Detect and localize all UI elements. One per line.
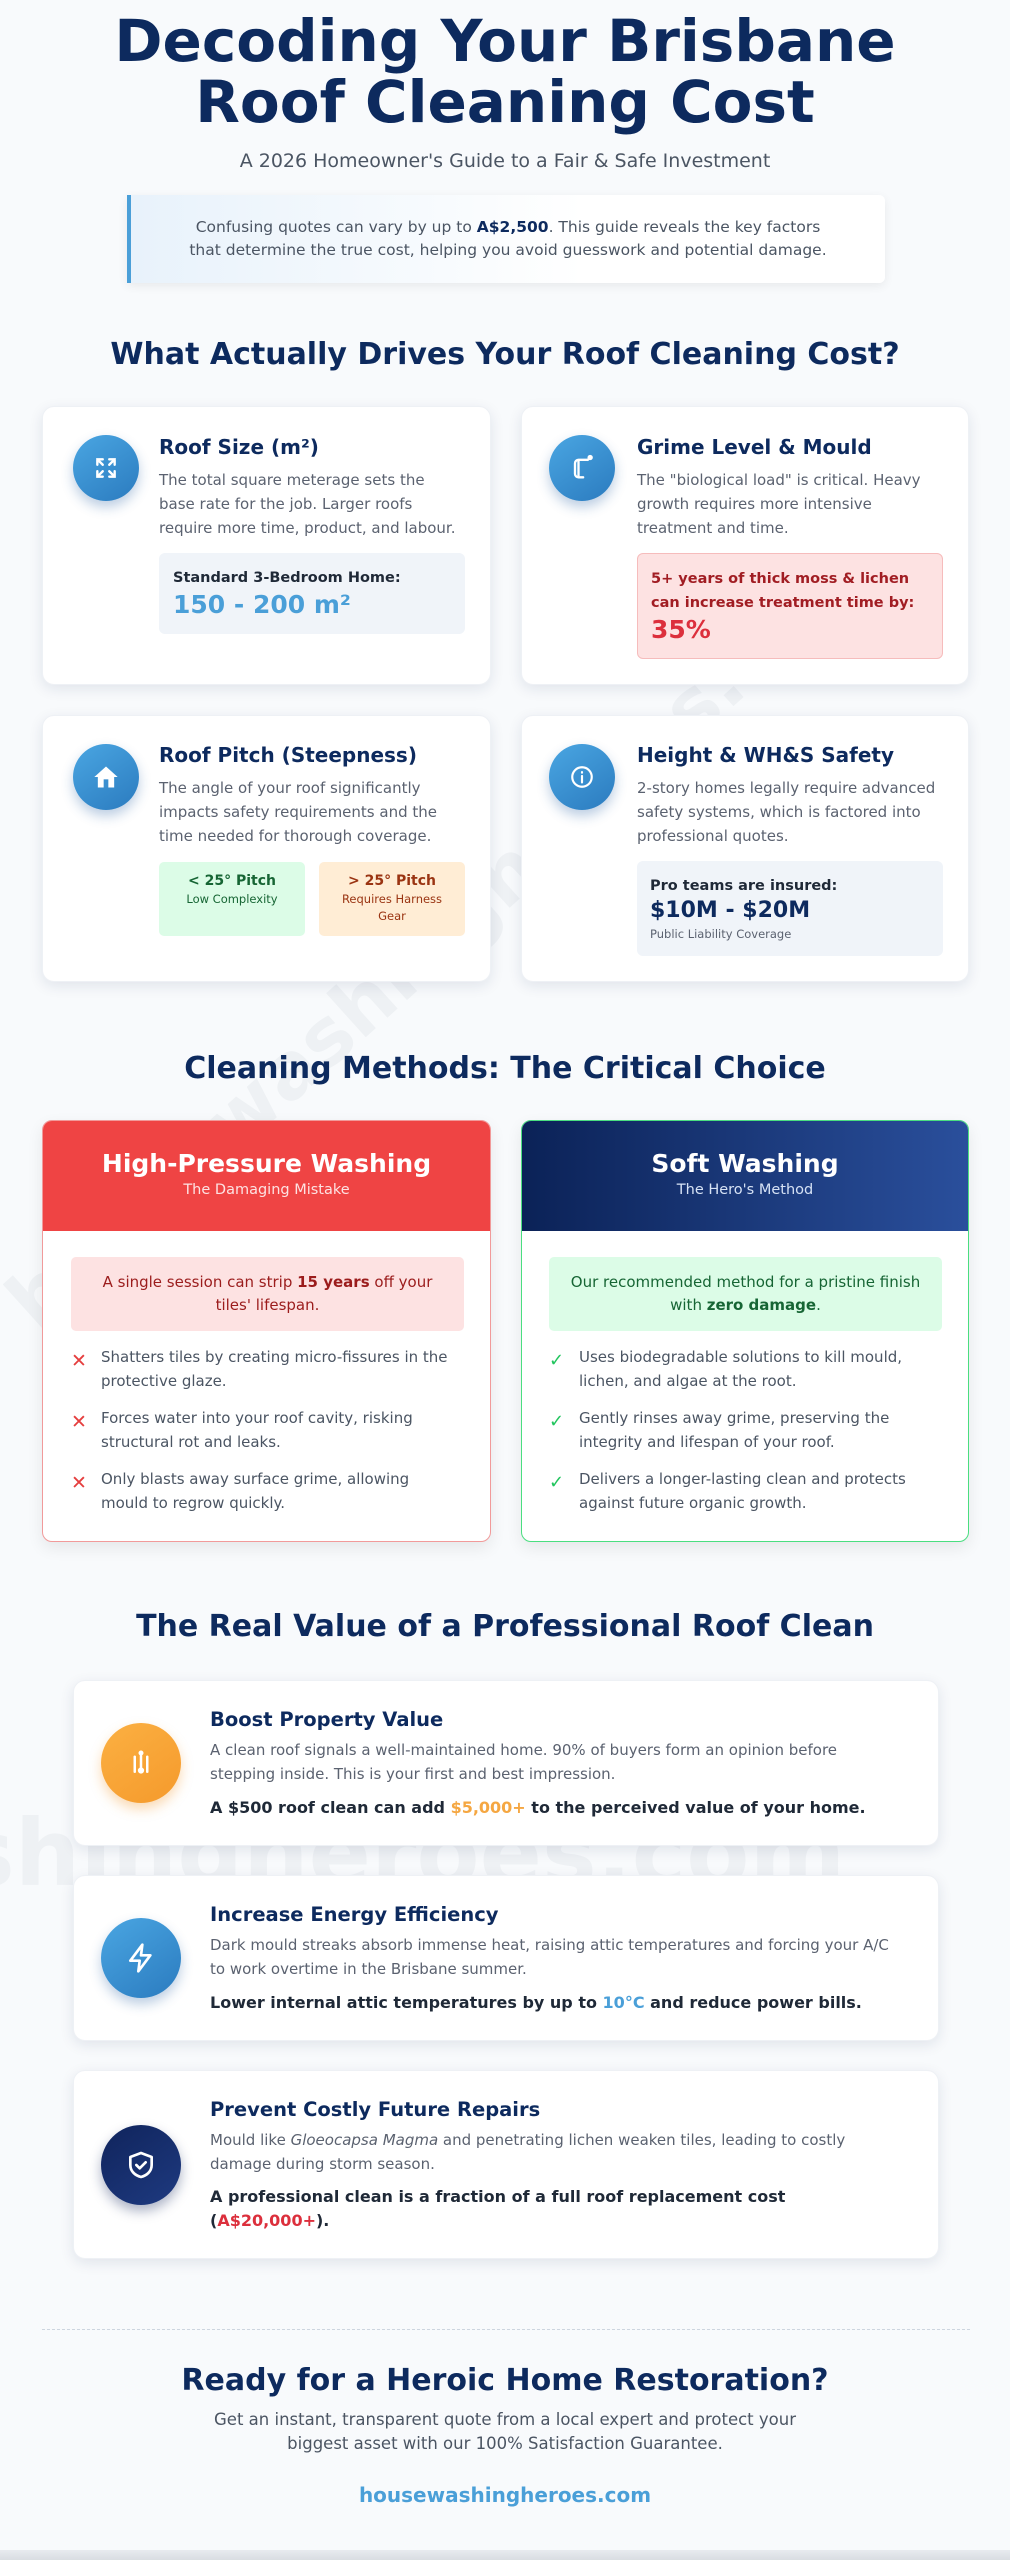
- highlight: A professional clean is a fraction of a full roof replacement cost: [210, 2187, 785, 2206]
- highlight: Lower internal attic temperatures by up to 10°C and reduce power bills.: [210, 1993, 862, 2012]
- heading: Grime Level & Mould: [637, 435, 872, 459]
- pitch: low: < 25° Pitch: [188, 873, 276, 889]
- text: 2-story homes legally require advanced: [637, 779, 935, 797]
- header: [522, 1121, 968, 1231]
- panel: soft wash: [521, 1120, 969, 1542]
- header: [43, 1121, 490, 1231]
- stat box: [159, 553, 465, 634]
- panel: repairs: [73, 2070, 939, 2259]
- intro callout: that determine the true cost, helping you avoid guesswork and potential damage.: [189, 241, 827, 259]
- text: growth requires more intensive: [637, 495, 872, 513]
- stat box: red: 5+ years of thick moss & lichen: [651, 571, 909, 587]
- callout: tiles' lifespan.: [216, 1296, 319, 1314]
- CTA text: [214, 2410, 796, 2453]
- callout: A single session can strip 15 years off your: [103, 1273, 432, 1291]
- list: positives: ✓: [549, 1411, 564, 1432]
- list: negatives: mould to regrow quickly.: [101, 1494, 285, 1512]
- heading: Height & WH&S Safety: [637, 743, 894, 767]
- text: treatment and time.: [637, 519, 789, 537]
- CTA text: biggest asset with our 100% Satisfaction Guarantee.: [287, 2434, 723, 2453]
- icon: hook: [549, 435, 615, 501]
- header: The Hero's Method: [677, 1182, 813, 1198]
- heading: methods: Cleaning Methods: The Critical Choice: [184, 1051, 826, 1086]
- stat box: Public Liability Coverage: [650, 927, 791, 941]
- list: negatives: protective glaze.: [101, 1372, 227, 1390]
- watermark diagonal: housewashingheroes.: [0, 639, 762, 1347]
- text: The total square meterage sets the: [159, 471, 425, 489]
- highlight: [210, 2187, 786, 2230]
- callout: with zero damage.: [670, 1296, 821, 1314]
- text: Dark mould streaks absorb immense heat, raising attic temperatures and forcing your A/C: [210, 1936, 889, 1954]
- list: positives: ✓: [549, 1350, 564, 1371]
- list: positives: lichen, and algae at the root.: [579, 1372, 796, 1390]
- list: positives: integrity and lifespan of your roof.: [579, 1433, 835, 1451]
- text: [158, 779, 437, 845]
- heading: cost drivers: What Actually Drives Your Roof Cleaning Cost?: [110, 337, 900, 372]
- callout: Our recommended method for a pristine finish: [571, 1273, 920, 1291]
- pitch: high: Requires Harness: [342, 892, 442, 906]
- stat box: [637, 861, 943, 956]
- title: [114, 7, 896, 136]
- list: positives: Uses biodegradable solutions to kill mould,: [579, 1348, 902, 1366]
- text: base rate for the job. Larger roofs: [159, 495, 412, 513]
- panel: grime: [521, 406, 969, 685]
- pitch: high: > 25° Pitch: [348, 873, 436, 889]
- stat box: Pro teams are insured:: [650, 878, 837, 894]
- intro callout: Confusing quotes can vary by up to A$2,500. This guide reveals the key factors: [196, 218, 820, 236]
- icon: expand: [73, 435, 139, 501]
- text: [210, 1741, 837, 1783]
- text: require more time, product, and labour.: [159, 519, 455, 537]
- list: negatives: ✕: [71, 1350, 87, 1372]
- panel: property value: [73, 1680, 939, 1846]
- list: positives: Gently rinses away grime, preserving the: [579, 1409, 889, 1427]
- text: [210, 2131, 845, 2173]
- stat box: $10M - $20M: [650, 898, 810, 923]
- title: Decoding Your Brisbane: [114, 7, 896, 75]
- list: negatives: Shatters tiles by creating micro-fissures in the: [101, 1348, 448, 1366]
- header: Soft Washing: [651, 1149, 839, 1178]
- list: negatives: [71, 1348, 448, 1512]
- text: impacts safety requirements and the: [159, 803, 437, 821]
- stat box: Standard 3-Bedroom Home:: [173, 570, 401, 586]
- text: stepping inside. This is your first and best impression.: [210, 1765, 615, 1783]
- highlight: A $500 roof clean can add $5,000+ to the perceived value of your home.: [210, 1798, 866, 1817]
- panel: roof size: [42, 406, 491, 685]
- stat box: red: 35%: [651, 615, 711, 644]
- text: [637, 779, 935, 845]
- stat box: 150 - 200 m²: [173, 590, 351, 619]
- pitch: high: [319, 862, 465, 936]
- heading: Roof Pitch (Steepness): [159, 743, 417, 767]
- heading: Roof Size (m²): [159, 435, 319, 459]
- pitch: low: [159, 862, 305, 936]
- callout: [71, 1257, 464, 1331]
- callout: [549, 1257, 942, 1331]
- panel: high pressure: [42, 1120, 491, 1542]
- text: The "biological load" is critical. Heavy: [637, 471, 921, 489]
- heading: value: The Real Value of a Professional Roof Clean: [136, 1609, 874, 1644]
- text: Mould like Gloeocapsa Magma and penetrating lichen weaken tiles, leading to costly: [210, 2131, 845, 2149]
- panel: roof pitch: [42, 715, 491, 982]
- header: High-Pressure Washing: [102, 1149, 431, 1178]
- title: Roof Cleaning Cost: [195, 68, 815, 136]
- heading: Prevent Costly Future Repairs: [210, 2098, 540, 2121]
- list: negatives: structural rot and leaks.: [101, 1433, 281, 1451]
- stat box: red: [637, 553, 943, 659]
- subtitle: A 2026 Homeowner's Guide to a Fair & Safe Investment: [240, 150, 770, 172]
- text: to work overtime in the Brisbane summer.: [210, 1960, 527, 1978]
- icon: info: [549, 744, 615, 810]
- text: professional quotes.: [637, 827, 789, 845]
- icon: thermometer: [101, 1723, 181, 1803]
- text: [158, 471, 455, 537]
- text: damage during storm season.: [210, 2155, 435, 2173]
- text: A clean roof signals a well-maintained home. 90% of buyers form an opinion before: [210, 1741, 837, 1759]
- intro callout: [127, 195, 885, 283]
- list: negatives: ✕: [71, 1411, 87, 1433]
- list: negatives: Only blasts away surface grime, allowing: [101, 1470, 409, 1488]
- CTA heading: Ready for a Heroic Home Restoration?: [181, 2363, 829, 2398]
- highlight: (A$20,000+).: [210, 2211, 329, 2230]
- stat box: red: can increase treatment time by:: [651, 595, 914, 611]
- text: [636, 471, 921, 537]
- list: positives: ✓: [549, 1472, 564, 1493]
- text: The angle of your roof significantly: [159, 779, 421, 797]
- pitch: low: Low Complexity: [186, 892, 278, 906]
- pitch: high: Gear: [378, 909, 406, 923]
- header: The Damaging Mistake: [183, 1182, 350, 1198]
- text: time needed for thorough coverage.: [159, 827, 431, 845]
- list: positives: [549, 1348, 906, 1512]
- heading: Increase Energy Efficiency: [210, 1903, 499, 1926]
- list: positives: against future organic growth.: [579, 1494, 806, 1512]
- panel: energy: [73, 1875, 939, 2041]
- icon: shield: [101, 2125, 181, 2205]
- panel: safety: [521, 715, 969, 982]
- icon: house: [73, 744, 139, 810]
- heading: Boost Property Value: [210, 1708, 443, 1731]
- list: negatives: ✕: [71, 1472, 87, 1494]
- icon: bolt: [101, 1918, 181, 1998]
- list: negatives: Forces water into your roof cavity, risking: [101, 1409, 413, 1427]
- text: [210, 1936, 889, 1978]
- list: positives: Delivers a longer-lasting clean and protects: [579, 1470, 906, 1488]
- CTA link: housewashingheroes.com: [359, 2483, 651, 2507]
- text: safety systems, which is factored into: [637, 803, 921, 821]
- CTA text: Get an instant, transparent quote from a local expert and protect your: [214, 2410, 796, 2429]
